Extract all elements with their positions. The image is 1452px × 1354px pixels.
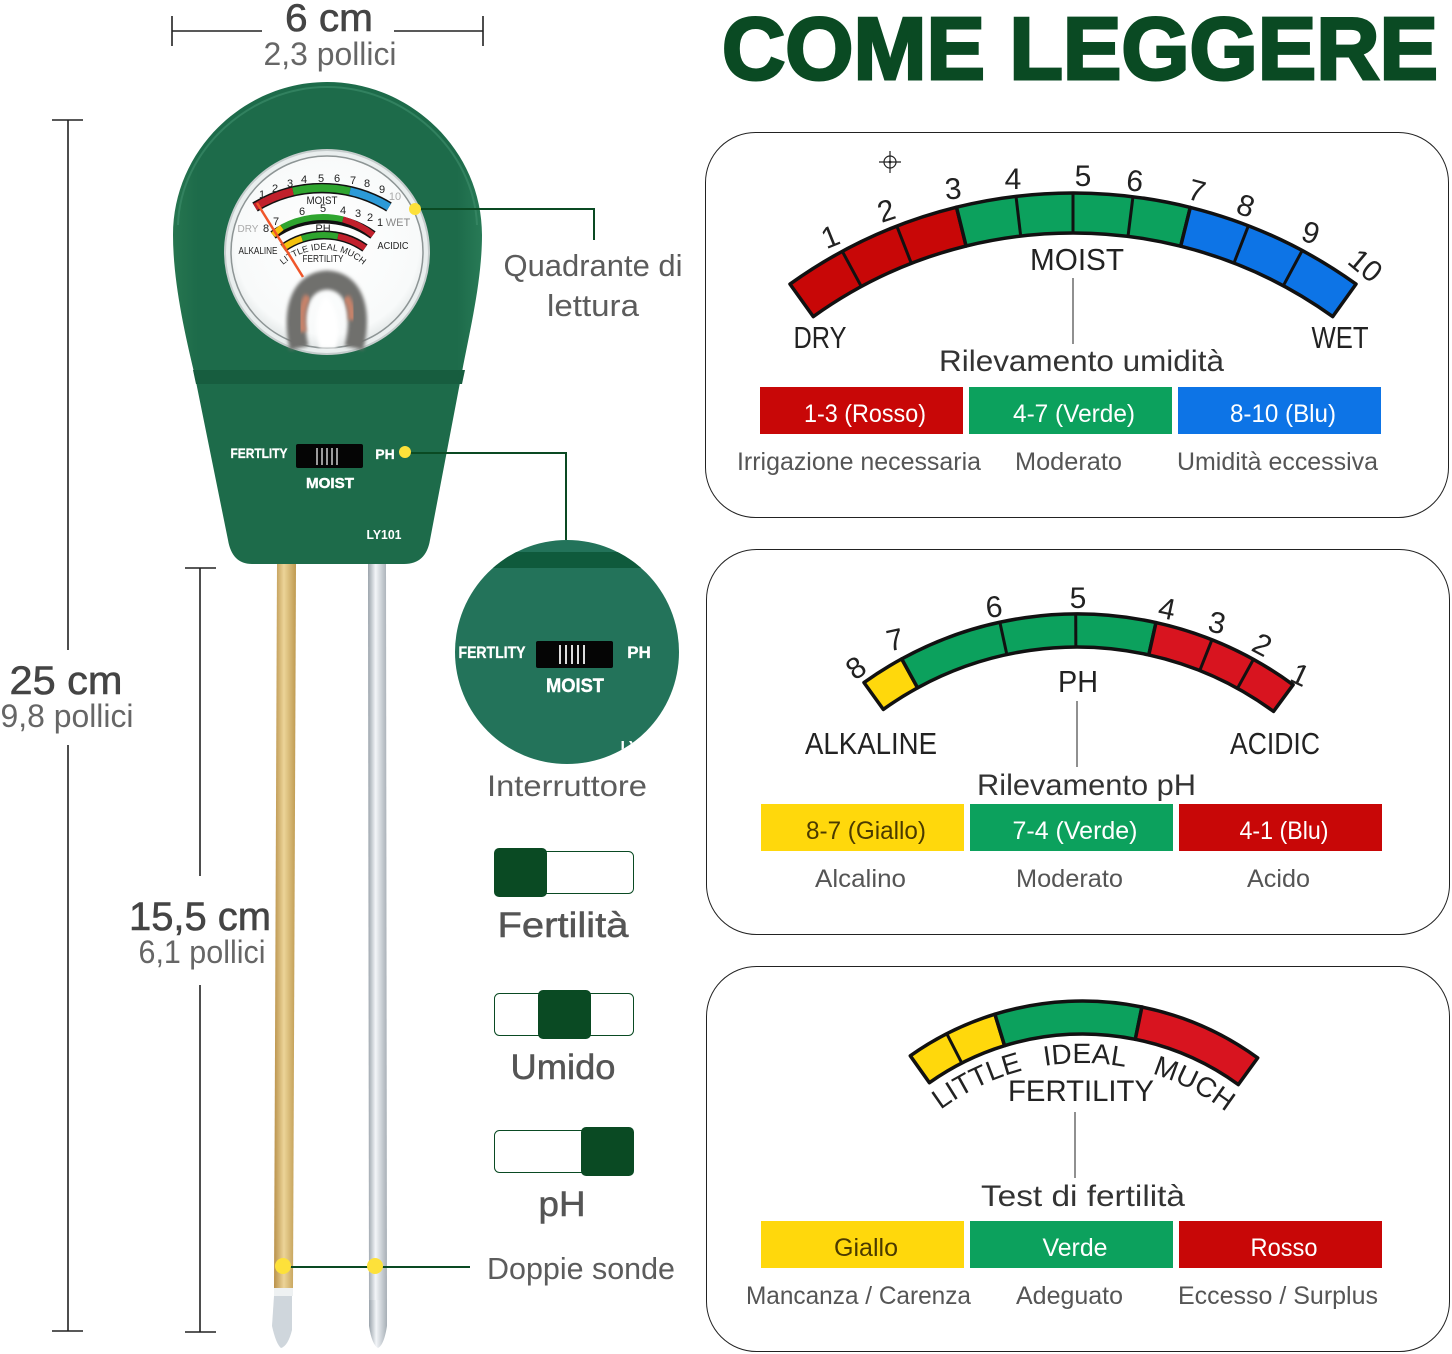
- captions: moisture: Moderato: [1015, 448, 1122, 476]
- magnified switch circle: [455, 540, 679, 764]
- captions: moisture: Umidità eccessiva: [1177, 448, 1378, 476]
- pH gauge: 6: [984, 590, 1004, 625]
- probe length dimension: 15,5 cm: 15,5 cm: [129, 895, 271, 939]
- dial: 2: [272, 183, 278, 195]
- pH gauge: ACIDIC: [1230, 726, 1320, 761]
- captions: moisture: [737, 448, 1378, 476]
- probe length dimension: 15,5 cm: 6,1 pollici: [138, 934, 266, 970]
- pH gauge: ALKALINE: [805, 726, 937, 761]
- dial: WET: [386, 217, 410, 229]
- callout: switch leader line: [399, 446, 566, 540]
- moisture gauge: 10: [1342, 243, 1388, 290]
- dial: 2: [367, 212, 373, 224]
- legend bars: pH: [761, 804, 1382, 851]
- pH gauge: 5: [1070, 582, 1086, 615]
- fertility gauge: LITTLE: [931, 1052, 1022, 1108]
- fertility gauge: [908, 999, 1260, 1178]
- heading: moisture: Rilevamento umidità: [939, 345, 1224, 378]
- dial: 8: [263, 223, 269, 235]
- dial: [224, 149, 430, 355]
- legend bars: fertility: Verde: [1042, 1234, 1108, 1262]
- dial: 1: [377, 217, 383, 229]
- pH gauge: 1: [1285, 657, 1314, 694]
- moisture gauge: 9: [1298, 215, 1324, 252]
- legend bars: moisture: [760, 387, 1381, 434]
- pH gauge: [805, 582, 1320, 767]
- legend bars: moisture: 1-3 (Rosso): [804, 400, 926, 428]
- width dimension: 6 cm: [172, 0, 483, 72]
- moisture gauge: 1: [817, 219, 844, 256]
- meter body: [173, 82, 482, 564]
- pH gauge: 3: [1205, 606, 1228, 641]
- moisture gauge: 2: [873, 193, 899, 230]
- toggle: fertility: Fertilità: [498, 906, 629, 945]
- moisture gauge: 7: [1184, 173, 1209, 210]
- heading: fertility: Test di fertilità: [981, 1180, 1185, 1213]
- icon: crosshair: [879, 151, 901, 173]
- moisture gauge: MOIST: [1030, 242, 1124, 277]
- captions: fertility: [746, 1282, 1378, 1310]
- dial: 5: [318, 173, 324, 185]
- captions: fertility: Adeguato: [1016, 1282, 1123, 1310]
- moisture gauge: [790, 160, 1388, 355]
- probes: [272, 564, 387, 1348]
- dial: 7: [273, 216, 279, 228]
- captions: pH: Alcalino: [815, 865, 906, 893]
- selector switch on body: PH: [375, 446, 395, 462]
- dial: FERTILITY: [302, 254, 344, 265]
- captions: pH: Moderato: [1016, 865, 1123, 893]
- legend bars: moisture: 4-7 (Verde): [1013, 400, 1135, 428]
- legend bars: moisture: 8-10 (Blu): [1230, 400, 1336, 428]
- dial: 8: [364, 178, 370, 190]
- pH gauge: 7: [884, 623, 907, 658]
- captions: pH: Acido: [1247, 865, 1310, 893]
- moisture gauge: WET: [1312, 320, 1369, 355]
- panel: fertility: [706, 966, 1450, 1352]
- dial: 10: [389, 191, 401, 203]
- height dimension: 25 cm: [0, 120, 134, 1331]
- dial: 3: [355, 208, 361, 220]
- heading: pH: Rilevamento pH: [977, 769, 1196, 802]
- dial: 4: [340, 205, 346, 217]
- moisture gauge: DRY: [794, 320, 846, 355]
- legend bars: fertility: [761, 1221, 1382, 1268]
- pH gauge: PH: [1058, 664, 1098, 699]
- selector switch on body: MOIST: [306, 475, 354, 492]
- pH gauge: 8: [840, 650, 873, 687]
- callout: reading dial: [409, 203, 682, 323]
- height dimension: 25 cm: 25 cm: [10, 659, 122, 703]
- dial: LITTLE IDEAL MUCH: [280, 243, 366, 264]
- callout: dual probes: [275, 1251, 675, 1286]
- fertility gauge: MUCH: [1154, 1056, 1236, 1110]
- callout: reading dial: lettura: [547, 288, 640, 323]
- magnified switch circle: MOIST: [546, 676, 604, 697]
- dial: 1: [259, 189, 265, 201]
- dial: 5: [320, 203, 326, 215]
- fertility gauge: IDEAL: [1044, 1044, 1125, 1067]
- callout: reading dial: Quadrante di: [504, 248, 682, 283]
- dial: 6: [299, 206, 305, 218]
- moisture gauge: 6: [1125, 164, 1145, 199]
- toggle: pH: pH: [538, 1185, 586, 1224]
- toggle: fertility: [494, 848, 634, 945]
- magnified switch circle: LY: [621, 739, 640, 756]
- title: COME LEGGERE: [722, 0, 1438, 98]
- magnified switch circle: FERTLITY: [458, 643, 526, 662]
- legend bars: fertility: Giallo: [834, 1234, 898, 1262]
- dial: 9: [379, 184, 385, 196]
- captions: fertility: Mancanza / Carenza: [746, 1282, 971, 1310]
- dial: 3: [287, 178, 293, 190]
- dial: DRY: [238, 224, 259, 235]
- pH gauge: 4: [1155, 592, 1178, 627]
- legend bars: pH: 7-4 (Verde): [1012, 817, 1138, 845]
- selector switch on body: LY101: [366, 527, 402, 542]
- toggle: moisture: Umido: [510, 1048, 616, 1087]
- legend bars: pH: 8-7 (Giallo): [806, 817, 926, 845]
- captions: moisture: Irrigazione necessaria: [737, 448, 981, 476]
- toggle: moisture: [494, 990, 634, 1087]
- selector switch on body: FERTLITY: [230, 445, 288, 461]
- magnified switch circle: PH: [627, 643, 651, 662]
- dial: 4: [301, 174, 307, 186]
- dial: 6: [334, 173, 340, 185]
- toggle: pH: [494, 1127, 634, 1224]
- dial: 7: [350, 175, 356, 187]
- panel: moisture: [706, 132, 1448, 518]
- legend bars: pH: 4-1 (Blu): [1240, 817, 1328, 845]
- dial: ACIDIC: [378, 241, 408, 252]
- selector switch on body: [230, 444, 402, 542]
- height dimension: 25 cm: 9,8 pollici: [0, 698, 134, 734]
- dial: ALKALINE: [238, 246, 278, 257]
- width dimension: 6 cm: 2,3 pollici: [264, 36, 396, 72]
- moisture gauge: 8: [1233, 188, 1259, 225]
- fertility gauge: FERTILITY: [1008, 1075, 1154, 1108]
- captions: pH: [815, 865, 1310, 893]
- label: switch: Interruttore: [487, 770, 647, 803]
- captions: fertility: Eccesso / Surplus: [1178, 1282, 1378, 1310]
- panel: pH: [706, 550, 1450, 934]
- dial: MOIST: [306, 195, 338, 207]
- dial: PH: [315, 223, 331, 235]
- callout: dual probes: Doppie sonde: [487, 1251, 675, 1286]
- moisture gauge: 3: [944, 172, 963, 207]
- moisture gauge: 5: [1075, 160, 1091, 193]
- moisture gauge: 4: [1005, 163, 1021, 196]
- pH gauge: 2: [1247, 627, 1277, 664]
- probe length dimension: 15,5 cm: [129, 568, 271, 1332]
- legend bars: fertility: Rosso: [1250, 1234, 1318, 1262]
